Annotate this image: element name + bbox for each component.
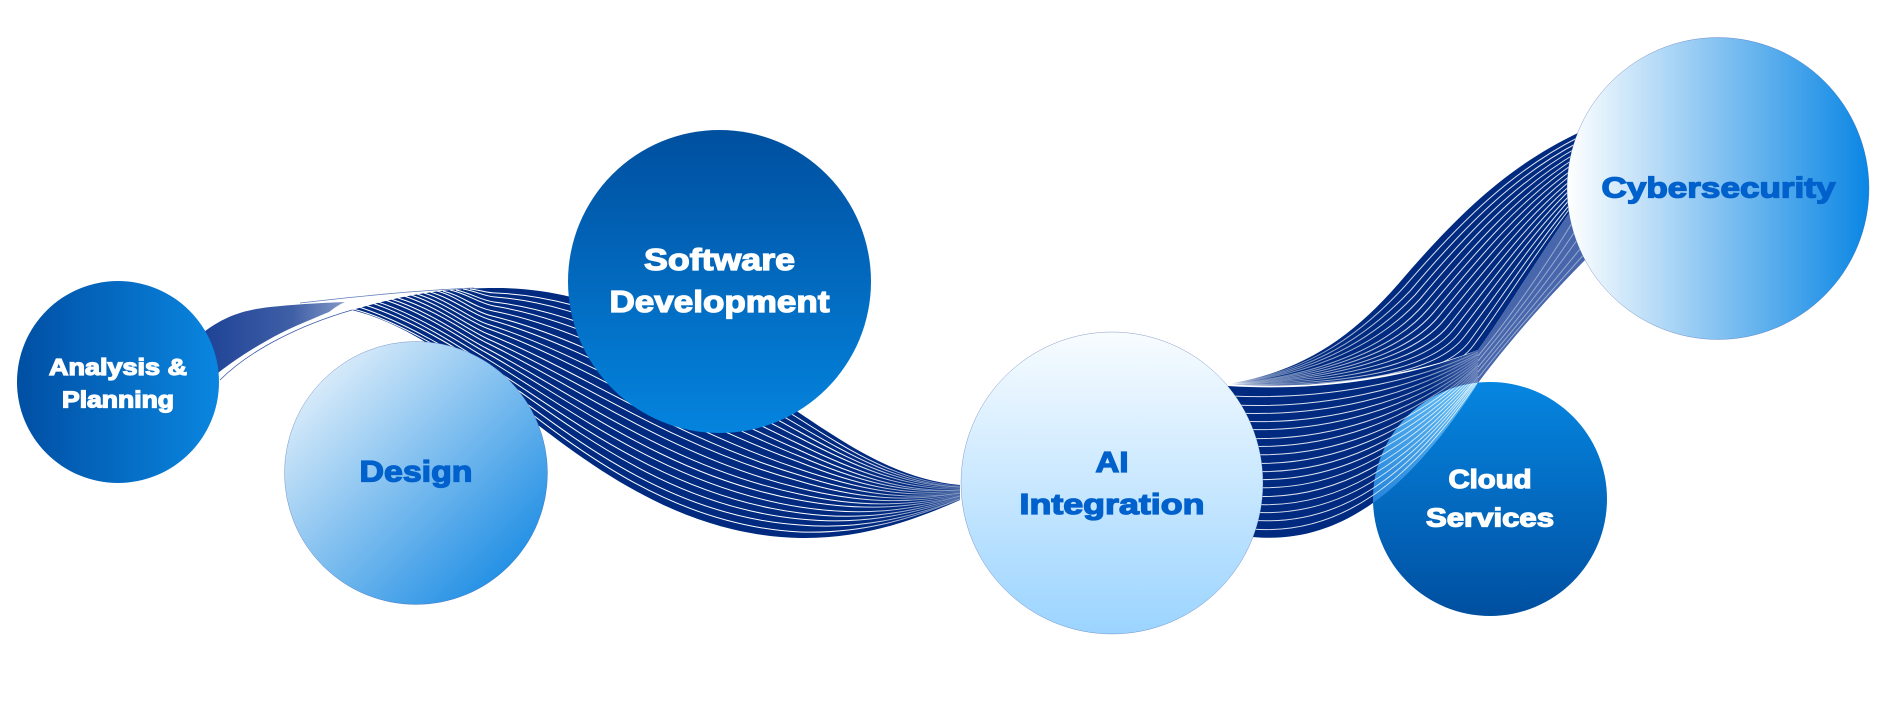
ribbon: main wave from design to AI integration: [352, 288, 960, 538]
label: AI Integration: Integration: [1020, 489, 1204, 521]
label: Analysis & Planning: Analysis &: [49, 354, 187, 380]
label: AI Integration: AI: [1096, 447, 1128, 479]
label: Software Development: Software: [644, 242, 795, 277]
node: Design: [284, 342, 548, 604]
node: Analysis & Planning: [17, 281, 219, 483]
node: Software Development: [568, 130, 871, 433]
label: Cloud Services: Cloud: [1448, 464, 1532, 494]
label: Analysis & Planning: Planning: [62, 386, 174, 412]
ribbon overlap on cloud circle: [1373, 382, 1478, 503]
label: Cloud Services: [1426, 464, 1554, 532]
label: Cybersecurity: Cybersecurity: [1602, 172, 1836, 204]
label: Design: Design: [360, 456, 472, 488]
label: Software Development: Development: [610, 284, 830, 319]
label: AI Integration: [1020, 447, 1204, 521]
label: Analysis & Planning: [49, 354, 187, 412]
ribbon: upper band from AI integration to cybersecurity: [1228, 132, 1580, 387]
node: Cybersecurity: [1567, 38, 1869, 340]
node: Cloud Services: [1373, 382, 1607, 616]
ribbon: lower band from AI integration: [1228, 350, 1478, 538]
node: AI Integration: [961, 332, 1263, 634]
label: Software Development: [610, 242, 830, 319]
ribbon: analysis fan: [200, 288, 474, 380]
label: Cloud Services: Services: [1426, 502, 1554, 532]
ribbon: fine fan into cybersecurity: [1478, 212, 1590, 383]
